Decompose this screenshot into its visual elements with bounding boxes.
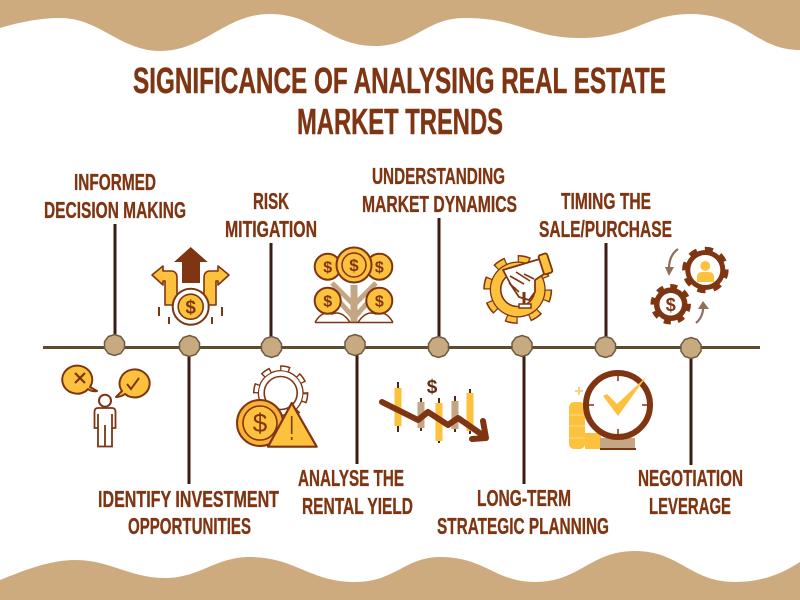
label: negotiation leverage: [638, 465, 743, 519]
icon: coin and warning with gear: [237, 368, 317, 447]
label: long-term strategic planning: [437, 485, 609, 539]
label: identify investment opportunities: OPPORTUNITIES: [128, 513, 251, 539]
label: risk mitigation: [225, 188, 317, 242]
label: understanding market dynamics: UNDERSTANDING: [372, 163, 505, 189]
icon: people and money gears: $: [666, 295, 676, 315]
label: timing the sale/purchase: [539, 188, 672, 242]
icon: money tree: $: [375, 294, 384, 310]
icon: money tree: [315, 248, 393, 322]
icon: people and money gears: [653, 249, 726, 323]
label: timing the sale/purchase: SALE/PURCHASE: [539, 216, 672, 242]
timeline axis: [43, 346, 760, 349]
icon: money tree: $: [323, 294, 332, 310]
label: informed decision making: [44, 169, 186, 223]
icon: person with choice bubbles: [62, 366, 150, 446]
icon: money tree: $: [375, 260, 384, 276]
icon: falling candlestick chart: $: [427, 377, 438, 398]
timeline nodes: [104, 334, 701, 358]
bottom wave banner: [0, 551, 800, 600]
top wave banner: [0, 0, 800, 51]
label: analyse the rental yield: RENTAL YIELD: [302, 493, 413, 519]
label: identify investment opportunities: IDENTIFY INVESTMENT: [98, 486, 279, 512]
stems: [115, 218, 691, 484]
label: risk mitigation: RISK: [253, 188, 289, 214]
label: long-term strategic planning: STRATEGIC PLANNING: [437, 513, 609, 539]
icon: arrows and coin: [152, 247, 229, 325]
label: negotiation leverage: NEGOTIATION: [638, 465, 743, 491]
label: informed decision making: DECISION MAKING: [44, 197, 186, 223]
icon: falling candlestick chart: [382, 377, 486, 443]
icon: coin and warning with gear: $: [253, 408, 268, 438]
title: [133, 60, 666, 142]
icon: gear with hand: [487, 253, 553, 320]
label: risk mitigation: MITIGATION: [225, 216, 317, 242]
label: understanding market dynamics: MARKET DYNAMICS: [362, 191, 517, 217]
label: analyse the rental yield: [298, 465, 413, 519]
label: understanding market dynamics: [362, 163, 517, 217]
icon: clock with check and coins: [569, 373, 650, 449]
icon: arrows and coin: $: [185, 298, 196, 318]
icon: money tree: $: [323, 260, 332, 276]
label: negotiation leverage: LEVERAGE: [649, 493, 731, 519]
label: identify investment opportunities: [98, 486, 279, 539]
label: informed decision making: INFORMED: [74, 169, 156, 195]
label: analyse the rental yield: ANALYSE THE: [298, 465, 404, 491]
label: long-term strategic planning: LONG-TERM: [477, 485, 571, 511]
label: timing the sale/purchase: TIMING THE: [561, 188, 651, 214]
title: MARKET TRENDS: [297, 101, 503, 142]
icon: money tree: $: [349, 256, 359, 275]
